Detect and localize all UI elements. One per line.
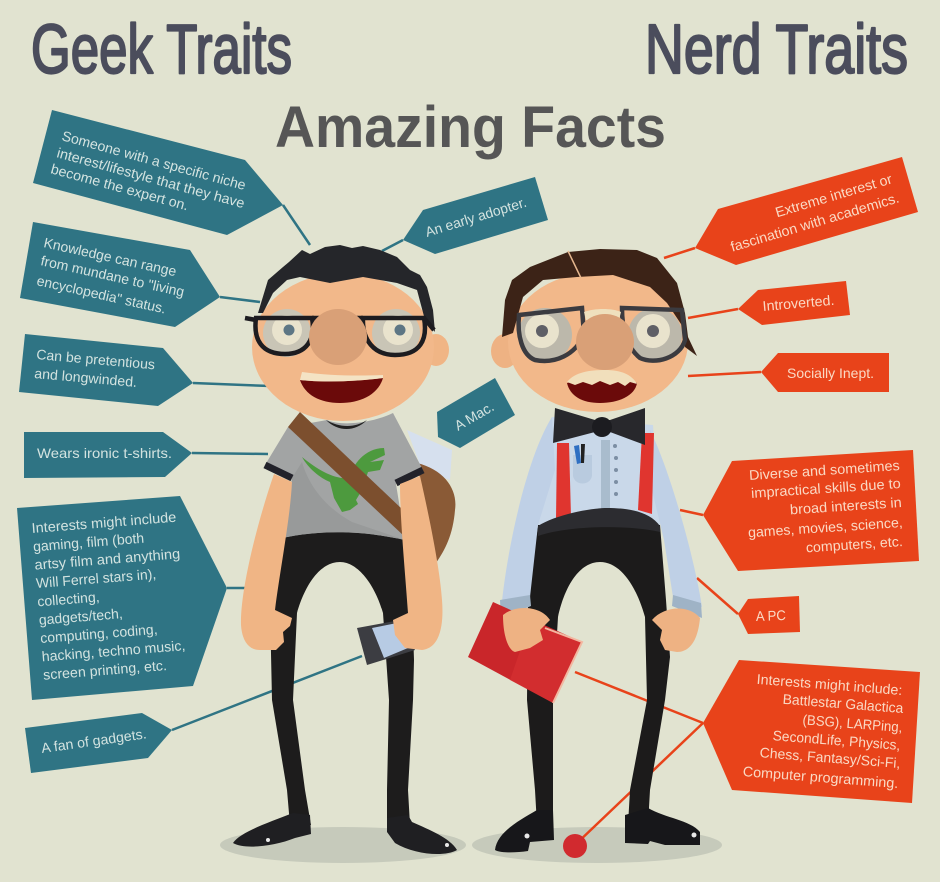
callout: A Mac: [437, 378, 515, 448]
callout: ironic t-shirts: Wears ironic t-shirts.: [37, 445, 172, 461]
eye left: [263, 309, 311, 357]
eye left: [518, 308, 572, 362]
bag: [417, 463, 455, 563]
callout: fan of gadgets: [25, 713, 172, 773]
right arm and hand: [393, 476, 442, 650]
glasses: [245, 318, 434, 355]
ear: [423, 334, 449, 366]
collar: [326, 420, 367, 429]
callout: introverted: Introverted.: [762, 292, 835, 314]
callout: knowledge: [20, 222, 220, 327]
left arm and hand: [241, 474, 292, 650]
teeth: [300, 372, 383, 381]
mouth: [300, 378, 383, 403]
callout: geek interests: Will Ferrel stars in),: [35, 566, 157, 591]
belt: [538, 508, 660, 536]
connector lines: geek: [172, 205, 403, 730]
sleeve cuffs: [265, 465, 292, 478]
callout: geek interests: artsy film and anything: [34, 545, 181, 573]
dinosaur print: [302, 448, 385, 512]
callout: early adopter: [403, 177, 548, 254]
callout: knowledge: Knowledge can range: [42, 234, 178, 279]
callout: introverted: [738, 281, 850, 325]
callout: A Mac: A Mac.: [452, 398, 497, 434]
callout: geek interests: hacking, techno music,: [41, 637, 186, 664]
trousers and legs: [270, 532, 414, 825]
shoe right: [625, 808, 700, 845]
suspenders: [556, 443, 571, 519]
callout: socially inept: [761, 353, 889, 392]
callout: niche interest: interest/lifestyle that they have: [55, 144, 247, 211]
callout: geek interests: gadgets/tech,: [38, 605, 123, 628]
paper behind bag: [407, 430, 452, 480]
callout: pretentious: and longwinded.: [34, 365, 138, 390]
callout: geek interests: computing, coding,: [40, 621, 158, 646]
callout: diverse skills: Diverse and sometimes: [748, 457, 900, 483]
callout: fan of gadgets: A fan of gadgets.: [40, 725, 147, 756]
callout: geek interests: gaming, film (both: [32, 530, 145, 554]
eye right: [628, 308, 682, 362]
callout: pretentious: [19, 334, 193, 406]
figure: geek: [233, 245, 457, 854]
callout: knowledge: from mundane to "living: [39, 252, 186, 300]
callout: nerd interests: Chess, Fantasy/Sci-Fi,: [759, 744, 901, 771]
callout: diverse skills: broad interests in: [789, 494, 902, 517]
callout: academics: [695, 157, 918, 265]
head: [508, 272, 688, 412]
callout: A PC: [738, 596, 800, 634]
ear: [491, 334, 519, 368]
ground shadow: geek: [220, 827, 466, 863]
ground shadow: nerd: [472, 827, 722, 863]
mouth: [567, 379, 637, 403]
callout: socially inept: Socially Inept.: [787, 365, 874, 381]
left hand: [503, 608, 550, 652]
callout: geek interests: screen printing, etc.: [43, 657, 167, 683]
callout: academics: fascination with academics.: [729, 190, 901, 255]
callout: diverse skills: impractical skills due to: [750, 475, 901, 501]
callout: nerd interests: Computer programming.: [742, 763, 899, 791]
callout: ironic t-shirts: [24, 432, 192, 478]
connector lines: nerd: [575, 248, 761, 845]
heading: Amazing Facts: Amazing Facts: [275, 95, 666, 160]
head: [252, 273, 434, 421]
callout: geek interests: collecting,: [37, 589, 100, 609]
callout: nerd interests: Interests might include:: [756, 671, 903, 698]
pocket and pens: [573, 444, 592, 484]
callout: diverse skills: computers, etc.: [805, 533, 903, 555]
cuffs: [500, 595, 531, 618]
callout: academics: Extreme interest or: [773, 170, 894, 220]
figure: nerd: [468, 249, 702, 852]
right sleeve: [650, 430, 702, 607]
glasses bridge tape: [584, 309, 621, 320]
callout: geek interests: [17, 496, 227, 700]
eye right: [372, 309, 420, 357]
callout: knowledge: encyclopedia" status.: [35, 272, 168, 316]
callout: geek interests: Interests might include: [31, 509, 177, 536]
book: [468, 602, 582, 703]
phone: [357, 620, 415, 665]
callout: nerd interests: SecondLife, Physics,: [772, 727, 901, 753]
t-shirt: [265, 413, 423, 540]
shirt: [538, 417, 660, 525]
placket and buttons: [601, 440, 618, 510]
callout: nerd interests: [703, 660, 920, 803]
callout: niche interest: become the expert on.: [49, 160, 190, 213]
callout: A PC: A PC: [756, 607, 786, 624]
shoe right: [387, 815, 457, 854]
hair parting: [568, 251, 581, 278]
callout: diverse skills: games, movies, science,: [747, 514, 903, 540]
callout: niche interest: Someone with a specific niche: [60, 127, 248, 193]
shoe left: [495, 810, 554, 852]
trousers and legs: [527, 525, 670, 825]
callout: early adopter: An early adopter.: [423, 194, 528, 240]
nose: [576, 314, 634, 370]
bow tie: [553, 408, 645, 445]
callout: pretentious: Can be pretentious: [36, 346, 156, 372]
hair: [258, 245, 435, 332]
callout: niche interest: [33, 110, 283, 235]
glasses: [519, 308, 685, 361]
hair: [502, 249, 697, 356]
title: Geek Traits: Geek Traits: [31, 10, 292, 88]
teeth: [567, 370, 637, 386]
bag strap: [288, 412, 404, 536]
callout: nerd interests: Battlestar Galactica: [782, 691, 904, 716]
callout: nerd interests: (BSG), LARPing,: [802, 711, 903, 735]
red ball: [563, 834, 587, 858]
right hand: [652, 608, 700, 652]
left sleeve: [501, 417, 555, 613]
callout: diverse skills: [703, 450, 919, 571]
nose: [309, 309, 367, 365]
shoe left: [233, 813, 311, 847]
